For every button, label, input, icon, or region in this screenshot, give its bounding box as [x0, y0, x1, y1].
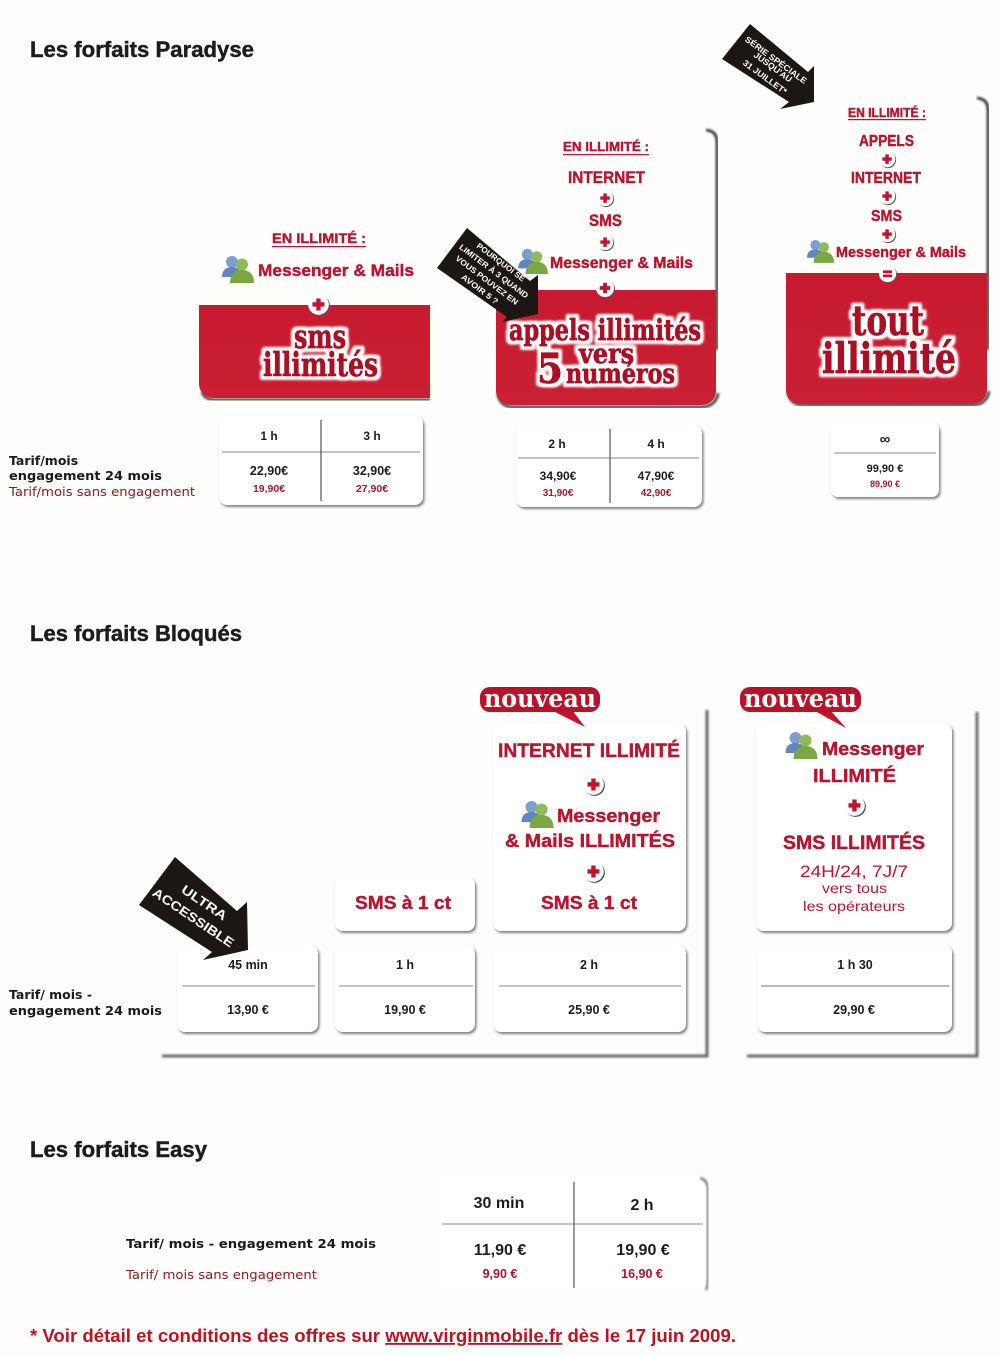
icon: plus: [844, 795, 866, 817]
text: Messenger illimite: ILLIMITÉ: [813, 765, 896, 786]
price table: unlimited: [831, 423, 939, 497]
text: INTERNET ILLIMITE: INTERNET ILLIMITÉ: [498, 740, 680, 762]
heading: Les forfaits Bloques: Les forfaits Bloqués: [30, 621, 242, 646]
text: Messenger and Mails illimites: Messenger: [557, 806, 660, 826]
price card: 45 min: 45 min: [228, 958, 268, 972]
price table: 30 min and 2 h: 30 min: [474, 1195, 524, 1212]
icon: plus: [879, 188, 896, 205]
text: Messenger and Mails illimites: & Mails ILLIMITÉS: [505, 830, 675, 851]
red block: tout illimite: [786, 273, 987, 404]
card edge shadow: [706, 130, 717, 350]
arrow: serie speciale: [722, 24, 814, 109]
price card: 1h30: 1 h 30: [837, 958, 873, 972]
text: Messenger illimite: [813, 739, 924, 786]
price card: 45 min: 13,90 €: [227, 1003, 269, 1017]
card edge shadow: [977, 98, 988, 350]
text: Messenger and Mails illimites: [505, 806, 675, 851]
text: sms illimites: [263, 317, 378, 384]
text: tout illimite: illimité: [822, 334, 956, 383]
icon: plus: [596, 279, 615, 298]
arrow: pourquoi se limiter: VOUS POUVEZ EN: [454, 254, 520, 307]
price table: 2h and 4h: 2 h: [548, 437, 566, 451]
text: appels illimites vers 5 numeros: numéros: [566, 359, 675, 390]
arrow: ultra accessible: [139, 857, 248, 960]
price card: 1 h: [335, 945, 475, 1032]
icon: messenger people: [807, 240, 834, 263]
icon: messenger people: [518, 249, 548, 274]
arrow: pourquoi se limiter: LIMITER À 3 QUAND: [457, 243, 530, 300]
text: appels illimites vers 5 numeros: 5: [537, 345, 563, 393]
icon: plus: [308, 294, 330, 316]
panel: Paradyse plan 3: [722, 24, 989, 405]
price card: 2 h: 2 h: [580, 958, 598, 972]
arrow: serie speciale: SÉRIE SPÉCIALE: [743, 34, 809, 86]
text: INTERNET: INTERNET: [851, 170, 921, 187]
text: 24H/24 7J/7 vers tous les operateurs: les opérateurs: [803, 898, 905, 914]
bottom shadow: [788, 391, 989, 405]
text: 24H/24 7J/7 vers tous les operateurs: [800, 862, 908, 914]
price card: 45 min: [177, 945, 318, 1032]
icon: messenger people: [222, 256, 254, 283]
frame shadow: [747, 712, 977, 1056]
price table: 1h and 3h: [219, 416, 423, 505]
heading: Les forfaits Paradyse: Les forfaits Paradyse: [30, 37, 254, 62]
price table: 1h and 3h: 1 h: [260, 429, 278, 443]
bottom shadow: [498, 393, 718, 407]
badge: nouveau: [740, 684, 861, 728]
text: tout illimite: [822, 297, 956, 383]
price table: 2h and 4h: 47,90€: [638, 469, 675, 483]
label: tarif bloques: Tarif/ mois -: [9, 987, 92, 1002]
price table: 2h and 4h: 4 h: [647, 437, 665, 451]
icon: plus: [583, 861, 605, 883]
icon: messenger people: [786, 732, 818, 759]
icon: plus: [879, 226, 896, 243]
price table: unlimited: 99,90 €: [867, 463, 903, 475]
label: tarif easy: Tarif/ mois - engagement 24 mois: [126, 1236, 376, 1251]
text: 24H/24 7J/7 vers tous les operateurs: vers tous: [822, 880, 887, 896]
text: tout illimite: tout: [852, 297, 924, 345]
label: en illimite: EN ILLIMITÉ :: [848, 105, 926, 120]
price table: 1h and 3h: 32,90€: [353, 464, 391, 478]
text: INTERNET: INTERNET: [568, 169, 645, 187]
text: 24H/24 7J/7 vers tous les operateurs: 24H/24, 7J/7: [800, 862, 908, 881]
panel: Paradyse plan 2: [437, 130, 718, 407]
price table: 30 min and 2 h: 9,90 €: [483, 1267, 517, 1281]
text: Messenger and Mails: Messenger & Mails: [550, 255, 693, 272]
price table: 1h and 3h: 22,90€: [250, 464, 288, 478]
arrow: pourquoi se limiter: AVOIR 5 ?: [459, 273, 500, 306]
label: tarif paradyse: Tarif/mois: [9, 453, 78, 468]
price card: 1 h: 1 h: [396, 958, 414, 972]
price card: 2 h: [493, 945, 686, 1032]
icon: plus: [583, 774, 605, 796]
heading: Les forfaits Easy: Les forfaits Easy: [30, 1137, 208, 1162]
label: tarif bloques: [9, 987, 162, 1018]
text: appels illimites vers 5 numeros: vers: [578, 339, 634, 370]
price table: 30 min and 2 h: 2 h: [630, 1197, 654, 1214]
label: tarif paradyse: engagement 24 mois: [9, 468, 162, 483]
card: Messenger SMS illimites: [756, 723, 952, 931]
price card: 1h30: 29,90 €: [833, 1003, 875, 1017]
price card: 1 h: 19,90 €: [384, 1003, 426, 1017]
arrow: serie speciale: 31 JUILLET*: [741, 58, 790, 97]
arrow: pourquoi se limiter: POURQUOI SE: [475, 241, 527, 284]
price card: 1h30: [757, 945, 952, 1032]
price table: 2h and 4h: 31,90€: [543, 488, 574, 499]
label: tarif bloques: engagement 24 mois: [9, 1003, 162, 1018]
icon: plus: [597, 190, 614, 207]
footnote: * Voir détail et conditions des offres sur www.virginmobile.fr dès le 17 juin 2009.: [30, 1326, 736, 1346]
price table: 30 min and 2 h: 19,90 €: [616, 1242, 670, 1259]
price table: 30 min and 2 h: 11,90 €: [474, 1242, 526, 1259]
label: en illimite: EN ILLIMITÉ :: [563, 139, 649, 154]
arrow: ultra accessible: ACCESSIBLE: [150, 885, 237, 951]
price table: 1h and 3h: 27,90€: [356, 483, 388, 495]
bottom shadow: [202, 392, 430, 400]
panel: Bloques frame right: [740, 684, 977, 1056]
text: SMS: SMS: [589, 212, 622, 230]
card: SMS 1 ct: SMS à 1 ct: [355, 893, 451, 913]
icon: plus: [597, 234, 614, 251]
icon: messenger people: [522, 801, 554, 828]
price table: 2h and 4h: 42,90€: [641, 488, 672, 499]
red block: sms illimites: [199, 305, 430, 398]
label: tarif easy: [125, 1236, 376, 1282]
price table: 2h and 4h: [516, 425, 702, 507]
frame shadow: [162, 710, 707, 1056]
arrow: pourquoi se limiter: [437, 228, 538, 322]
red block: appels illimites: [496, 290, 716, 405]
text: sms illimites: illimités: [263, 345, 378, 384]
text: APPELS: APPELS: [859, 133, 914, 150]
badge: nouveau: nouveau: [744, 684, 857, 713]
icon: plus: [879, 151, 896, 168]
arrow: ultra accessible: ULTRA: [179, 882, 231, 924]
price table: unlimited: 89,90 €: [870, 479, 900, 489]
label: en illimite: EN ILLIMITÉ :: [272, 230, 366, 246]
label: tarif easy: Tarif/ mois sans engagement: [125, 1267, 317, 1282]
text: SMS: SMS: [871, 208, 902, 225]
badge: nouveau: nouveau: [484, 684, 596, 713]
price table: unlimited: ∞: [880, 431, 891, 448]
text: Messenger and Mails: Messenger & Mails: [836, 245, 966, 261]
text: sms illimites: sms: [294, 317, 346, 356]
text: Messenger illimite: Messenger: [822, 739, 924, 759]
label: tarif paradyse: [8, 453, 195, 499]
label: tarif paradyse: Tarif/mois sans engagement: [8, 484, 195, 499]
text: Messenger and Mails: Messenger & Mails: [258, 261, 414, 280]
text: SMS 1 ct: SMS à 1 ct: [541, 893, 637, 913]
text: appels illimites vers 5 numeros: appels illimités: [509, 313, 701, 347]
text: appels illimites vers 5 numeros: [509, 313, 701, 393]
arrow: serie speciale: JUSQU'AU: [752, 50, 794, 84]
card: Internet Messenger SMS: [493, 723, 686, 931]
icon: equals: [879, 265, 897, 283]
panel: Paradyse plan 1: [199, 230, 430, 400]
badge: nouveau: [480, 684, 600, 727]
price card: 2 h: 25,90 €: [568, 1003, 610, 1017]
price table: 1h and 3h: 3 h: [363, 429, 381, 443]
panel: Bloques frame left: [139, 684, 707, 1056]
price table: 1h and 3h: 19,90€: [253, 483, 285, 495]
price table: 2h and 4h: 34,90€: [540, 469, 577, 483]
price table: 30 min and 2 h: 16,90 €: [621, 1267, 663, 1281]
price table: 30 min and 2 h: [437, 1177, 708, 1290]
card: SMS 1 ct: [335, 877, 475, 931]
text: SMS illimites: SMS ILLIMITÉS: [783, 832, 925, 854]
